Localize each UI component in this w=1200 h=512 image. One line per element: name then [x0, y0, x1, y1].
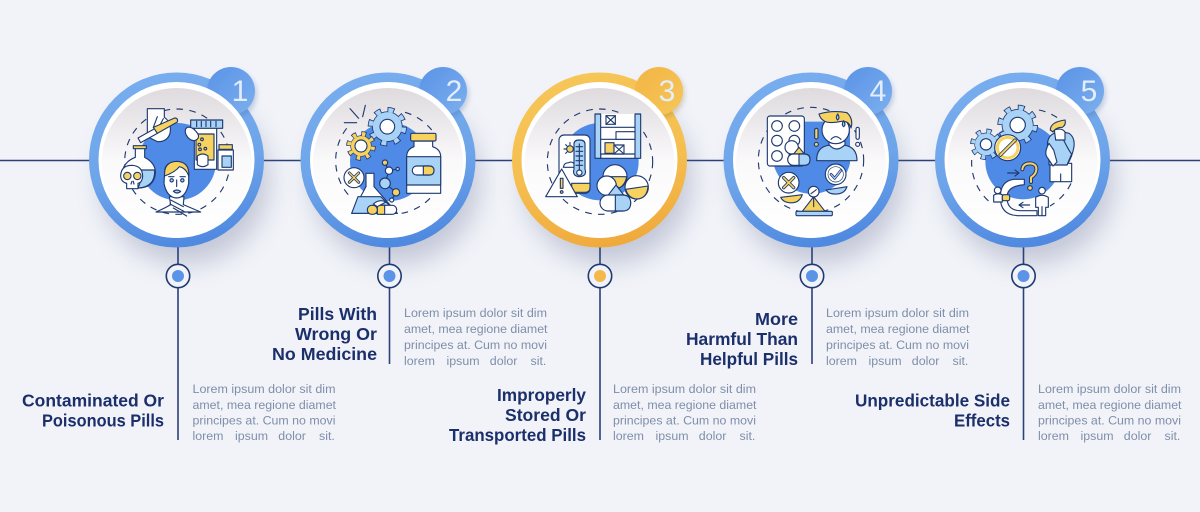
body text 5: principes at. Cum no movi [1038, 414, 1181, 428]
body text 1: principes at. Cum no movi [192, 414, 336, 428]
heading 5: Unpredictable Side [855, 390, 1010, 410]
heading 1 [22, 390, 164, 430]
body text 1 [192, 382, 337, 443]
body text 5: amet, mea regione diamet [1038, 398, 1182, 412]
ring 3 [512, 72, 687, 248]
number badge 1: 1 [232, 75, 248, 108]
body text 3 [613, 382, 757, 443]
body text 5: Lorem ipsum dolor sit dim [1038, 382, 1181, 396]
number badge 5 [1056, 67, 1106, 118]
body text 5: sit. [1164, 429, 1180, 443]
body text 4 [826, 306, 970, 368]
heading 2: No Medicine [272, 344, 377, 364]
number badge 2 [419, 67, 469, 118]
ring 2 [300, 72, 476, 248]
body text 4: dolor [912, 354, 939, 368]
heading 4: More [755, 309, 798, 329]
body text 5: dolor [1124, 429, 1151, 443]
icon: gears, bottle, flask and capsules [336, 105, 441, 214]
panel: step 3 improperly stored or transported pills [449, 67, 757, 445]
heading 3: Transported Pills [449, 425, 586, 445]
timeline marker 3 [588, 264, 612, 288]
inner disc 5 [944, 82, 1100, 238]
body text 4: ipsum [868, 354, 902, 368]
icon: blister pack, worried man and scale [758, 107, 864, 216]
number badge 1 [207, 67, 257, 118]
icon: thermometer, warehouse shelf and pills [546, 109, 653, 214]
heading 2: Pills With [298, 304, 377, 324]
heading 3: Stored Or [505, 405, 586, 425]
body text 4: principes at. Cum no movi [826, 338, 969, 352]
body text 1: lorem [192, 429, 223, 443]
heading 3: Improperly [497, 385, 586, 405]
body text 1: dolor [278, 429, 306, 443]
inner disc 3 [522, 82, 678, 238]
inner disc 4 [733, 82, 889, 238]
timeline marker 1 [166, 264, 190, 288]
icon: poison pills and sick woman [121, 109, 233, 216]
body text 5 [1038, 382, 1182, 443]
body text 3: Lorem ipsum dolor sit dim [613, 382, 756, 396]
number badge 3 [635, 67, 685, 118]
panel: step 5 unpredictable side effects [855, 67, 1182, 443]
heading 4: Harmful Than [686, 329, 798, 349]
heading 3 [449, 385, 586, 445]
timeline marker 2 [378, 264, 401, 288]
body text 2: sit. [530, 354, 546, 368]
body text 4: amet, mea regione diamet [826, 322, 970, 336]
body text 4: lorem [826, 354, 857, 368]
heading 4: Helpful Pills [700, 349, 798, 369]
body text 5: lorem [1038, 429, 1069, 443]
body text 1: amet, mea regione diamet [192, 398, 337, 412]
body text 2: ipsum [446, 354, 480, 368]
body text 2: dolor [490, 354, 517, 368]
body text 2: lorem [404, 354, 435, 368]
ring 5 [935, 72, 1110, 248]
icon: gears, ban sign, confused man and question mark [972, 108, 1074, 216]
heading 1: Poisonous Pills [42, 410, 164, 430]
heading 2: Wrong Or [295, 324, 377, 344]
heading 1: Contaminated Or [22, 390, 164, 410]
ring 1 [89, 72, 264, 248]
heading 5 [855, 390, 1010, 430]
body text 2: amet, mea regione diamet [404, 322, 548, 336]
panel: step 2 pills with wrong or no medicine [272, 67, 548, 368]
heading 2 [272, 304, 377, 364]
body text 2: principes at. Cum no movi [404, 338, 547, 352]
body text 1: ipsum [235, 429, 268, 443]
body text 1: Lorem ipsum dolor sit dim [192, 382, 336, 396]
timeline marker 4 [800, 264, 824, 288]
body text 1: sit. [319, 429, 335, 443]
body text 3: dolor [699, 429, 726, 443]
inner disc 2 [310, 82, 466, 238]
body text 3: lorem [613, 429, 644, 443]
panel: step 4 more harmful than helpful pills [686, 67, 970, 369]
number badge 4: 4 [870, 75, 886, 108]
heading 5: Effects [954, 410, 1010, 430]
number badge 3: 3 [659, 75, 675, 108]
panel: step 1 contaminated or poisonous pills [22, 67, 337, 443]
body text 2: Lorem ipsum dolor sit dim [404, 306, 547, 320]
body text 4: Lorem ipsum dolor sit dim [826, 306, 969, 320]
body text 3: sit. [740, 429, 755, 443]
body text 4: sit. [952, 354, 968, 368]
body text 3: amet, mea regione diamet [613, 398, 757, 412]
number badge 5: 5 [1081, 75, 1097, 108]
body text 3: ipsum [656, 429, 689, 443]
number badge 4 [844, 67, 894, 118]
body text 5: ipsum [1080, 429, 1114, 443]
timeline marker 5 [1012, 264, 1035, 288]
heading 4 [686, 309, 798, 369]
number badge 2: 2 [446, 75, 462, 108]
body text 2 [404, 306, 548, 368]
inner disc 1 [98, 82, 254, 238]
ring 4 [724, 72, 898, 248]
body text 3: principes at. Cum no movi [613, 414, 756, 428]
